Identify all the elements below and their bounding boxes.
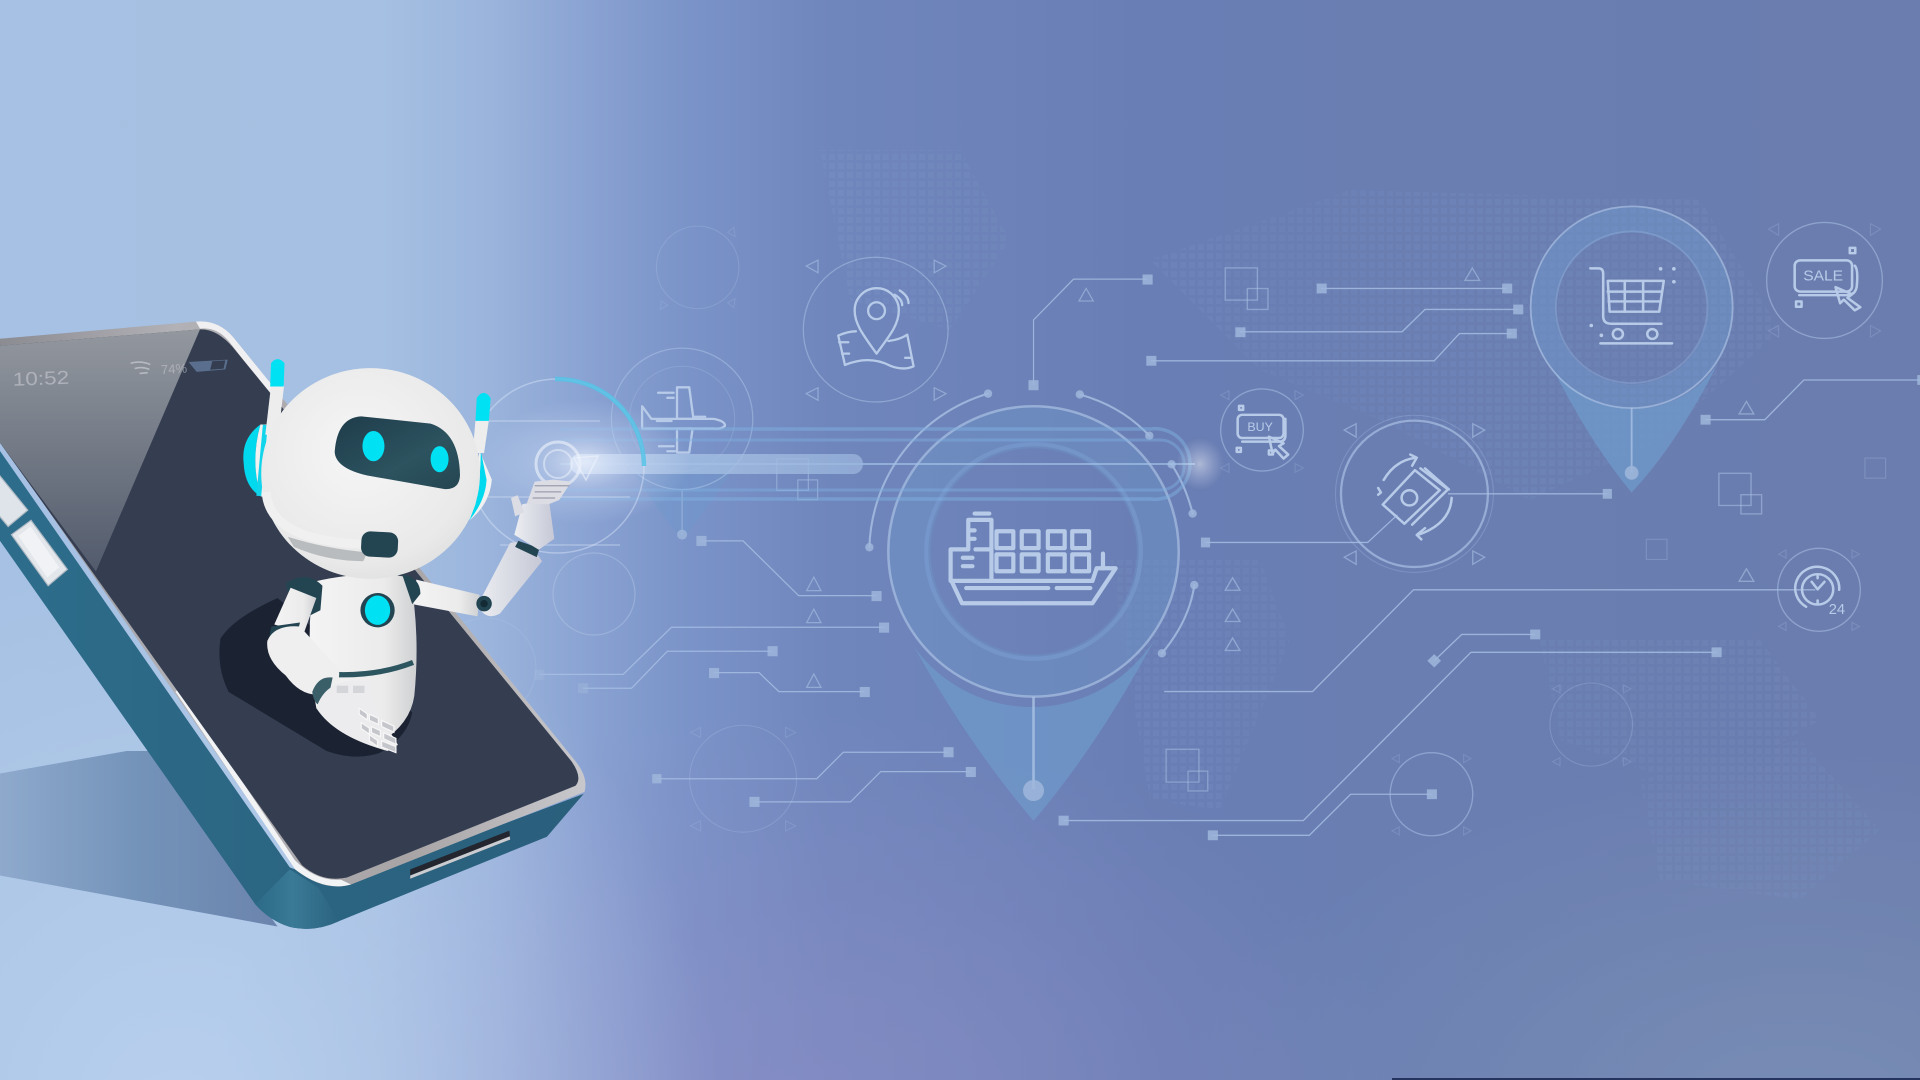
screen reflection <box>0 329 200 571</box>
square cluster right <box>1646 458 1886 559</box>
square pair <box>777 459 818 500</box>
right tech network <box>1059 206 1920 840</box>
right ear and antenna <box>469 393 492 520</box>
lower right circles <box>1390 683 1633 836</box>
faint partial circles near phone <box>436 553 635 718</box>
robot right arm <box>412 480 571 616</box>
phone <box>0 321 585 929</box>
icon: money exchange <box>1201 415 1612 572</box>
headset arm <box>266 492 399 561</box>
robot face visor <box>335 416 460 489</box>
icon: shopping cart <box>1589 267 1676 343</box>
faint circle top left <box>656 226 739 309</box>
icon: buy button: BUY <box>1247 420 1273 434</box>
circuit line: left middle <box>696 536 882 687</box>
light beam and racetrack lines <box>560 429 1224 499</box>
triangles column <box>1225 569 1754 651</box>
hand glow and touch target <box>470 379 690 553</box>
phone side wall <box>0 451 584 929</box>
lower circle with circuit lines <box>652 725 976 832</box>
icon: 24 hour clock <box>1164 548 1860 692</box>
big ship location pin <box>865 389 1199 821</box>
lower-left network square pair <box>1166 749 1208 791</box>
robot <box>243 359 571 753</box>
icon: 24 hour clock: 24 <box>1829 602 1845 618</box>
phone cast shadow <box>0 751 278 927</box>
robot head <box>261 368 480 579</box>
smartphone and robot <box>0 321 585 929</box>
phone bezel <box>0 321 585 886</box>
robot shadow on screen <box>219 598 412 757</box>
circuit line right <box>1701 375 1920 425</box>
left tech network <box>534 226 1199 832</box>
cart location pin <box>1530 206 1733 492</box>
side buttons <box>0 473 67 586</box>
icon: airplane pin <box>611 348 753 540</box>
bottom edge strip <box>1392 1078 1920 1080</box>
icon: buy button <box>1221 389 1303 472</box>
circuit line: top of ship <box>1028 274 1153 390</box>
status bar: 10:52 <box>12 367 69 390</box>
circuit lines: from phone <box>534 623 889 697</box>
charging port <box>410 831 510 879</box>
icon: sale button <box>1767 222 1882 338</box>
dotted world map <box>820 150 1880 900</box>
icon: location pin on map <box>803 257 948 402</box>
phone screen <box>0 329 578 879</box>
icon: sale button: SALE <box>1803 268 1843 284</box>
icon: container ship <box>951 514 1116 603</box>
status bar: 74% <box>160 360 188 377</box>
circuit lines lower right <box>1059 630 1722 840</box>
left ear and antenna <box>243 359 284 497</box>
circuit lines top <box>1146 268 1523 366</box>
square pair top <box>1225 268 1268 309</box>
robot torso <box>310 574 420 743</box>
status bar <box>12 360 228 390</box>
robot left arm <box>267 577 398 753</box>
